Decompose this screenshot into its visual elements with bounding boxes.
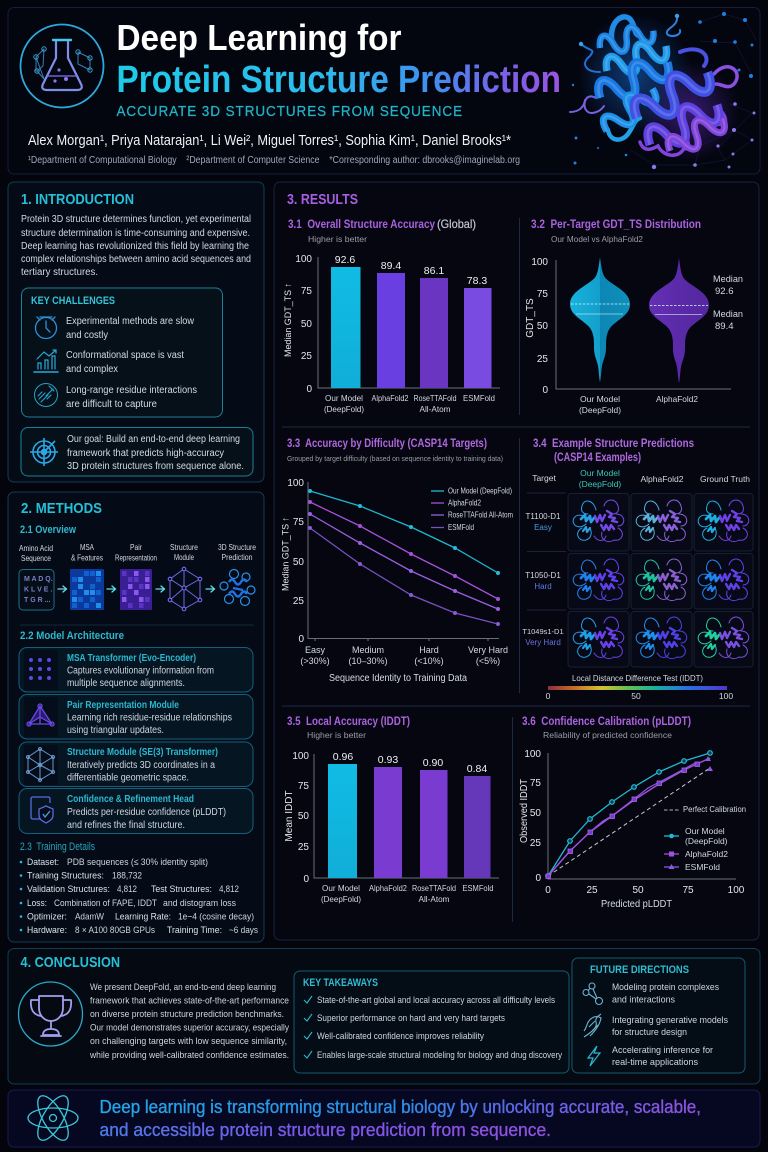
subheading 2.1: 2.1 Overview <box>20 524 76 536</box>
chart 3.5: local accuracy bars: All-Atom <box>418 894 450 904</box>
callout: our goal: 3D protein structures from sequence alone. <box>67 461 244 472</box>
chart 3.3: accuracy by difficulty lines: 50 <box>293 557 304 568</box>
sequence box <box>19 570 54 610</box>
legend: (DeepFold) <box>685 836 728 846</box>
card: MSA transformer: multiple sequence alignments. <box>67 678 185 689</box>
figure 3.4: example structure predictions: Target <box>532 473 556 483</box>
violin: alphafold2 <box>649 258 709 383</box>
chart 3.3: accuracy by difficulty lines: 25 <box>293 596 304 607</box>
box: key takeaways: State-of-the-art global and local accuracy across all difficulty levels <box>317 995 555 1005</box>
chart 3.3: accuracy by difficulty lines: Grouped by target difficulty (based on sequence identity to training data) <box>287 454 503 463</box>
chart 3.5: local accuracy bars: 25 <box>298 842 309 853</box>
card: confidence head: Predicts per-residue confidence (pLDDT) <box>67 807 226 818</box>
figure 3.4: example structure predictions: (DeepFold) <box>579 479 621 489</box>
chart 3.1: overall accuracy bars: 50 <box>301 319 312 330</box>
callout: key challenges: Conformational space is vast <box>66 350 184 361</box>
box: future directions: Accelerating inference for <box>612 1045 713 1055</box>
training details list: Test Structures: <box>151 884 212 894</box>
legend: AlphaFold2 <box>448 498 481 508</box>
chart 3.2: violin plot: 25 <box>537 354 548 365</box>
card: structure module: Iteratively predicts 3D coordinates in a <box>67 760 215 771</box>
box: future directions: real-time applications <box>612 1057 698 1067</box>
icon: cube <box>24 745 58 785</box>
pipeline diagram <box>19 543 256 611</box>
training details list: Training Structures: <box>27 870 104 880</box>
chart 3.3: accuracy by difficulty lines: 0 <box>298 634 304 645</box>
pipeline diagram: Module <box>174 553 194 562</box>
chart 3.6: confidence calibration: 25 <box>530 838 541 849</box>
card: MSA transformer: MSA Transformer (Evo-Encoder) <box>67 653 196 664</box>
icon: broken link <box>34 384 58 406</box>
banner text <box>100 1097 701 1140</box>
panel: methods <box>8 492 264 942</box>
chart 3.1: overall accuracy bars: AlphaFold2 <box>372 393 409 403</box>
chart 3.6: confidence calibration: 25 <box>586 885 598 896</box>
title: Protein Structure Prediction <box>116 59 561 101</box>
pipeline diagram: Sequence <box>21 554 51 563</box>
chart 3.3: accuracy by difficulty lines: Medium <box>352 645 384 655</box>
icon: target <box>30 438 58 466</box>
legend: RoseTTAFold All-Atom <box>448 510 513 520</box>
chart 3.6: confidence calibration: 0 <box>545 885 551 896</box>
card: structure module: differentiable geometric space. <box>67 772 189 784</box>
chart 3.3: accuracy by difficulty lines: Sequence Identity to Training Data <box>329 673 467 684</box>
chart 3.1: overall accuracy bars: 92.6 <box>335 254 355 266</box>
legend: AlphaFold2 <box>685 849 728 859</box>
panel: results <box>274 182 759 940</box>
conclusion text: on challenging targets with low sequence similarity, <box>90 1036 287 1046</box>
color bar: 0 <box>546 691 551 701</box>
icon: shield <box>31 797 53 823</box>
box: key takeaways: Superior performance on hard and very hard targets <box>317 1013 505 1023</box>
conclusion text <box>89 982 289 1060</box>
training details list: and distogram loss <box>163 898 236 908</box>
card: pair representation: Pair Representation Module <box>67 700 179 711</box>
callout: key challenges: Long-range residue interactions <box>66 385 197 396</box>
box: future directions: Integrating generative models <box>612 1015 728 1025</box>
chart 3.1: overall accuracy bars: 100 <box>295 254 312 265</box>
pipeline diagram: Representation <box>115 554 157 562</box>
chart 3.1: overall accuracy bars: (Global) <box>437 217 476 231</box>
chart 3.5: local accuracy bars: Higher is better <box>307 730 366 740</box>
callout: our goal: Our goal: Build an end-to-end deep learning <box>67 434 240 445</box>
panel: introduction <box>8 182 264 482</box>
legend: ESMFold <box>448 523 474 532</box>
chart 3.1: overall accuracy bars: (DeepFold) <box>324 404 364 414</box>
chart 3.2: violin plot: 100 <box>531 257 548 268</box>
pipeline diagram: Prediction <box>222 553 252 562</box>
icon: triangle <box>24 697 58 737</box>
chart 3.5: local accuracy bars: 3.5 Local Accuracy (IDDT) <box>287 714 410 728</box>
chart 3.1: overall accuracy bars: All-Atom <box>420 404 450 414</box>
chart 3.5: local accuracy bars: Our Model <box>322 883 360 893</box>
pipeline diagram: Pair <box>130 543 142 552</box>
chart 3.5: local accuracy bars: AlphaFold2 <box>369 883 407 893</box>
card: structure module: Structure Module (SE(3) Transformer) <box>67 747 218 758</box>
chart 3.3: accuracy by difficulty lines: 100 <box>287 478 304 489</box>
chart 3.5: local accuracy bars: 0.96 <box>333 751 353 763</box>
training details list: AdamW <box>75 912 104 922</box>
callout: key challenges <box>22 288 222 417</box>
box: key takeaways: KEY TAKEAWAYS <box>303 977 378 989</box>
intro paragraph: Protein 3D structure determines function, yet experimental <box>21 214 251 225</box>
chart 3.3: accuracy by difficulty lines: Easy <box>305 645 326 655</box>
chart 3.6: confidence calibration: 3.6 Confidence Calibration (pLDDT) <box>522 714 691 728</box>
icon: dots <box>24 650 58 690</box>
chart 3.3: accuracy by difficulty lines: (10–30%) <box>348 656 388 666</box>
training details list: ~6 days <box>229 925 258 935</box>
panel: conclusion <box>8 948 760 1084</box>
chart 3.1: overall accuracy bars: ESMFold <box>463 393 495 403</box>
figure 3.4: example structure predictions <box>522 436 753 701</box>
chart 3.6: confidence calibration: 50 <box>632 885 644 896</box>
figure 3.4: example structure predictions: Easy <box>534 523 552 532</box>
chart 3.3: accuracy by difficulty lines <box>280 436 513 684</box>
figure 3.4: example structure predictions: T1100-D1 <box>526 512 561 521</box>
chart 3.1: overall accuracy bars: 86.1 <box>424 265 444 277</box>
card: pair representation: Learning rich residue-residue relationships <box>67 712 232 724</box>
training details list: Hardware: <box>27 925 67 935</box>
heading: methods: 2. METHODS <box>21 500 102 517</box>
sequence box: T G R ... <box>24 597 50 604</box>
callout: key challenges: Experimental methods are slow <box>66 316 195 327</box>
chart 3.2: violin plot: 75 <box>537 289 548 300</box>
box: key takeaways: Well-calibrated confidence improves reliability <box>317 1031 484 1041</box>
chart 3.3: accuracy by difficulty lines: (<10%) <box>414 656 444 666</box>
training details list: 4,812 <box>219 884 239 894</box>
subtitle: ACCURATE 3D STRUCTURES FROM SEQUENCE <box>116 104 463 120</box>
figure 3.4: example structure predictions: Hard <box>534 582 552 591</box>
icon: DNA <box>584 1014 601 1037</box>
chart 3.6: confidence calibration: 100 <box>728 885 745 896</box>
chart 3.6: confidence calibration: 100 <box>524 749 541 760</box>
chart 3.6: confidence calibration: Reliability of predicted confidence <box>543 730 672 740</box>
box: future directions: Modeling protein complexes <box>612 982 719 992</box>
subheading 2.2: 2.2 Model Architecture <box>20 630 124 642</box>
MSA grid <box>70 569 104 610</box>
intro paragraph <box>21 214 251 278</box>
chart 3.2: violin plot: GDT_TS <box>525 298 536 338</box>
heading: results: 3. RESULTS <box>287 191 358 208</box>
banner text: Deep learning is transforming structural biology by unlocking accurate, scalable, <box>100 1097 701 1117</box>
chart 3.1: overall accuracy bars: 75 <box>301 286 312 297</box>
logo: flask in circle <box>20 24 104 108</box>
box: future directions: FUTURE DIRECTIONS <box>590 964 689 976</box>
legend: Our Model <box>685 826 725 836</box>
chart 3.1: overall accuracy bars: 3.1 Overall Structure Accuracy <box>288 217 435 231</box>
icon: lightning <box>588 1046 600 1066</box>
chart 3.3: accuracy by difficulty lines: 3.3 Accuracy by Difficulty (CASP14 Targets) <box>287 436 487 450</box>
heading: conclusion: 4. CONCLUSION <box>20 954 120 971</box>
callout: key challenges: are difficult to capture <box>66 399 157 410</box>
chart 3.2: violin plot: 0 <box>542 385 548 396</box>
legend <box>431 486 513 532</box>
training details list: Dataset: <box>27 857 59 867</box>
title: Deep Learning for <box>116 17 402 58</box>
training details list: Loss: <box>27 898 47 908</box>
subheading 2.3: 2.3 Training Details <box>20 841 95 853</box>
chart 3.1: overall accuracy bars: Higher is better <box>308 234 367 244</box>
banner text: and accessible protein structure prediction from sequence. <box>100 1120 551 1140</box>
chart 3.5: local accuracy bars: 0.90 <box>423 757 443 769</box>
pipeline diagram: 3D Structure <box>218 543 256 552</box>
chart 3.5: local accuracy bars: ESMFold <box>462 883 494 893</box>
chart 3.1: overall accuracy bars: 78.3 <box>467 275 487 287</box>
chart 3.5: local accuracy bars: 0 <box>303 874 309 885</box>
chart 3.6: confidence calibration: Predicted pLDDT <box>601 899 672 910</box>
chart 3.5: local accuracy bars: (DeepFold) <box>321 894 361 904</box>
chart 3.2: violin plot <box>525 217 743 415</box>
card: structure module <box>19 742 253 786</box>
card: pair representation: using triangular updates. <box>67 725 164 736</box>
arrows <box>58 586 214 592</box>
chart 3.2: violin plot: Our Model vs AlphaFold2 <box>551 234 643 244</box>
intro paragraph: tertiary structures. <box>21 267 98 278</box>
chart 3.2: violin plot: 92.6 <box>715 286 734 297</box>
legend: ESMFold <box>685 862 720 872</box>
conclusion text: framework that achieves state-of-the-art performance <box>90 996 289 1006</box>
chart 3.6: confidence calibration: 0 <box>535 873 541 884</box>
chart 3.5: local accuracy bars: 100 <box>292 751 309 762</box>
chart 3.5: local accuracy bars <box>284 714 499 904</box>
icon: trophy <box>18 982 82 1046</box>
chart 3.3: accuracy by difficulty lines: (>30%) <box>300 656 330 666</box>
box: future directions: and interactions <box>612 994 675 1004</box>
chart 3.5: local accuracy bars: 0.93 <box>378 754 398 766</box>
training details list: PDB sequences (≤ 30% identity split) <box>67 857 208 867</box>
intro paragraph: Deep learning has revolutionized this field by learning the <box>21 241 249 252</box>
legend: Our Model (DeepFold) <box>448 486 512 496</box>
chart 3.1: overall accuracy bars: 25 <box>301 351 312 362</box>
color bar: 100 <box>719 691 733 701</box>
training details list: 188,732 <box>112 870 142 880</box>
chart 3.2: violin plot: 50 <box>537 321 548 332</box>
chart 3.5: local accuracy bars: RoseTTAFold <box>412 883 456 893</box>
chart 3.1: overall accuracy bars: Our Model <box>325 393 363 403</box>
card: MSA transformer <box>19 648 253 692</box>
box: key takeaways: Enables large-scale structural modeling for biology and drug discovery <box>317 1050 562 1060</box>
training details list: Optimizer: <box>27 912 67 922</box>
box: key takeaways <box>294 971 569 1073</box>
sequence box: K L V E . <box>24 586 52 594</box>
affiliations: ¹Department of Computational Biology ²Department of Computer Science *Corresponding author: dbrooks@imaginelab.org <box>28 155 520 166</box>
title <box>116 17 561 101</box>
pipeline diagram: MSA <box>80 543 95 552</box>
chart 3.1: overall accuracy bars: RoseTTAFold <box>414 393 457 403</box>
chart 3.6: confidence calibration <box>519 714 746 910</box>
chart 3.3: accuracy by difficulty lines: (<5%) <box>476 656 500 666</box>
callout: key challenges: and complex <box>66 364 118 375</box>
training details list: Training Time: <box>167 925 222 935</box>
chart 3.2: violin plot: 89.4 <box>715 321 734 332</box>
card: confidence head: Confidence & Refinement Head <box>67 794 194 805</box>
pipeline diagram: & Features <box>71 554 103 562</box>
training details list: Learning Rate: <box>115 912 171 922</box>
header panel <box>8 8 760 174</box>
training details list: 4,812 <box>117 884 137 894</box>
cube network icon <box>168 567 202 611</box>
conclusion text: while providing well-calibrated confidence estimates. <box>89 1050 289 1060</box>
icon: atom <box>28 1091 78 1145</box>
card: confidence head <box>19 788 253 834</box>
chart 3.1: overall accuracy bars <box>283 217 500 414</box>
figure 3.4: example structure predictions: AlphaFold2 <box>640 474 684 484</box>
chart 3.1: overall accuracy bars: 89.4 <box>381 260 401 272</box>
training details list <box>20 857 258 935</box>
pipeline diagram: Amino Acid <box>19 544 53 553</box>
chart 3.5: local accuracy bars: 50 <box>298 811 309 822</box>
color bar <box>546 673 733 701</box>
training details list: 1e−4 (cosine decay) <box>178 912 254 922</box>
figure 3.4: example structure predictions: 3.4 Example Structure Predictions <box>533 436 694 450</box>
chart 3.2: violin plot: AlphaFold2 <box>656 394 698 404</box>
callout: key challenges: and costly <box>66 330 108 341</box>
callout: key challenges: KEY CHALLENGES <box>31 295 115 307</box>
chart 3.6: confidence calibration: 75 <box>682 885 694 896</box>
figure 3.4: example structure predictions: Ground Truth <box>700 474 750 484</box>
chart 3.2: violin plot: Median <box>713 309 743 320</box>
figure 3.4: example structure predictions: T1049s1-D1 <box>522 627 564 636</box>
intro paragraph: complex relationships between amino acid sequences and <box>21 254 251 265</box>
figure 3.4: example structure predictions: T1050-D1 <box>525 571 561 580</box>
color bar: Local Distance Difference Test (IDDT) <box>572 673 703 683</box>
chart 3.5: local accuracy bars: Mean IDDT <box>284 790 295 842</box>
intro paragraph: structure determination is time-consuming and expensive. <box>21 228 250 239</box>
chart 3.3: accuracy by difficulty lines: Hard <box>419 645 439 655</box>
training details list: 8 × A100 80GB GPUs <box>75 925 155 935</box>
chart 3.2: violin plot: 3.2 Per-Target GDT_TS Distribution <box>531 217 701 231</box>
card: MSA transformer: Captures evolutionary information from <box>67 666 214 676</box>
figure 3.4: example structure predictions: Very Hard <box>525 638 561 647</box>
icon: chart <box>34 350 58 372</box>
chart 3.3: accuracy by difficulty lines: Very Hard <box>468 645 508 655</box>
chart 3.1: overall accuracy bars: 0 <box>306 384 312 395</box>
icon: molecule <box>583 983 602 1004</box>
small protein icon <box>220 570 255 606</box>
chart 3.3: accuracy by difficulty lines: Median GDT_TS ↑ <box>280 517 292 591</box>
chart 3.6: confidence calibration: Observed IDDT <box>519 779 530 843</box>
chart 3.6: confidence calibration: 75 <box>530 778 541 789</box>
chart 3.3: accuracy by difficulty lines: 75 <box>293 517 304 528</box>
violin: our model <box>570 257 630 382</box>
pair grid <box>120 569 152 610</box>
callout: our goal <box>21 428 253 476</box>
icon: stopwatch <box>36 317 56 338</box>
figure 3.4: example structure predictions: (CASP14 Examples) <box>554 450 641 464</box>
box: future directions <box>572 958 745 1073</box>
chart 3.6: confidence calibration: 50 <box>530 808 541 819</box>
chart 3.5: local accuracy bars: 0.84 <box>467 763 487 775</box>
conclusion text: Our model demonstrates superior accuracy, especially <box>90 1022 289 1032</box>
legend: Perfect Calibration <box>683 804 746 814</box>
protein illustration <box>570 12 756 169</box>
heading: introduction: 1. INTRODUCTION <box>21 191 134 208</box>
legend <box>664 804 746 872</box>
color bar: 50 <box>631 691 641 701</box>
training details list: Validation Structures: <box>27 884 110 894</box>
training details list: Combination of FAPE, IDDT <box>54 898 157 908</box>
card: confidence head: and refines the final structure. <box>67 820 185 831</box>
chart 3.2: violin plot: Median <box>713 274 743 285</box>
box: future directions: for structure design <box>612 1027 687 1037</box>
sequence box: M A D Q. <box>24 576 53 583</box>
pipeline diagram: Structure <box>170 543 198 552</box>
figure 3.4: example structure predictions: Our Model <box>580 468 620 478</box>
authors: Alex Morgan¹, Priya Natarajan¹, Li Wei², Miguel Torres¹, Sophia Kim¹, Daniel Brooks¹* <box>28 133 511 149</box>
chart 3.5: local accuracy bars: 75 <box>298 781 309 792</box>
chart 3.2: violin plot: (DeepFold) <box>579 405 621 415</box>
chart 3.1: overall accuracy bars: Median GDT_TS ↑ <box>283 283 294 357</box>
chart 3.2: violin plot: Our Model <box>580 394 620 404</box>
callout: our goal: framework that predicts high-accuracy <box>67 448 224 459</box>
conclusion text: We present DeepFold, an end-to-end deep learning <box>90 982 276 992</box>
card: pair representation <box>19 694 253 739</box>
banner: take-home message <box>8 1090 760 1147</box>
conclusion text: on diverse protein structure prediction benchmarks. <box>90 1009 284 1019</box>
